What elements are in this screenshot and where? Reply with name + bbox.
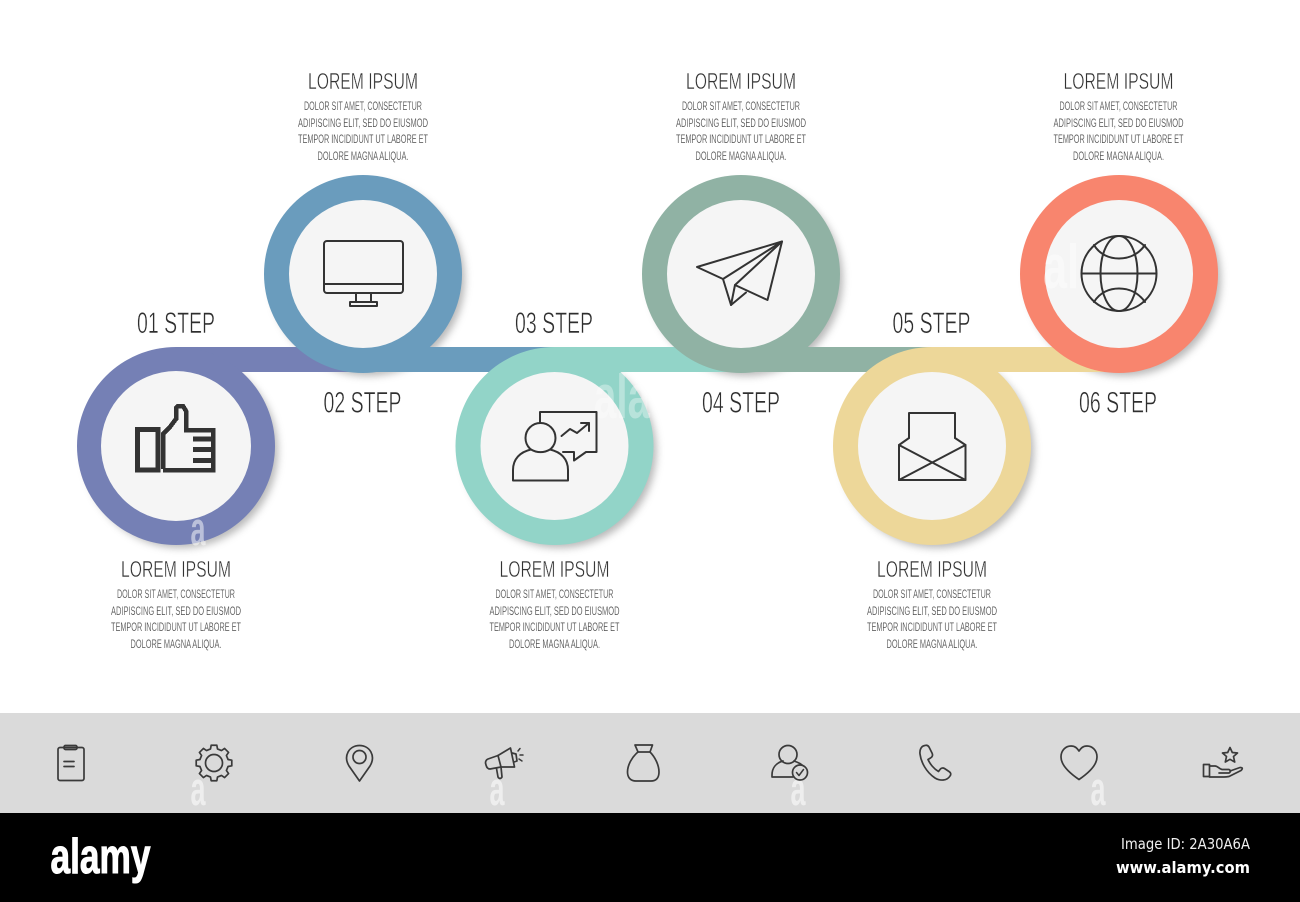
text block: step 5: TEMPOR INCIDIDUNT UT LABORE ET [867,622,997,634]
text block: step 3: TEMPOR INCIDIDUNT UT LABORE ET [490,622,620,634]
step 5 ring and connector [833,347,1122,545]
watermark letters on icon strip: a [190,762,206,815]
step labels: 02 STEP [324,386,402,420]
icon: money bag [628,745,659,781]
footer: black watermark bar [0,813,1300,902]
step labels [137,307,1157,420]
text block: step 3: DOLOR SIT AMET, CONSECTETUR [496,589,614,601]
alamy logo: alamy [50,830,150,884]
text block: step 6: TEMPOR INCIDIDUNT UT LABORE ET [1054,134,1184,146]
text block: step 6: LOREM IPSUM [1064,68,1174,94]
watermark letters on circles: al [1043,233,1079,302]
text block: step 2: ADIPISCING ELIT, SED DO EIUSMOD [298,118,428,130]
text block: step 5 [867,556,997,651]
text block: step 1: DOLORE MAGNA ALIQUA. [130,639,222,651]
step labels: 05 STEP [892,307,970,340]
step 3 ring and connector [456,347,744,545]
text block: step 2: LOREM IPSUM [308,68,418,94]
text block: step 3: ADIPISCING ELIT, SED DO EIUSMOD [490,606,620,618]
icon: user with check badge [772,746,808,780]
text block: step 1: DOLOR SIT AMET, CONSECTETUR [117,589,235,601]
icon: desktop monitor [324,241,403,306]
text block: step 2: DOLORE MAGNA ALIQUA. [318,151,408,163]
website url: www.alamy.com [1116,858,1250,877]
step labels: 01 STEP [137,307,215,340]
watermark letters on icon strip: a [790,762,806,815]
icon: globe [1082,236,1156,311]
text block: step 6: DOLOR SIT AMET, CONSECTETUR [1060,101,1178,113]
text block: step 3: LOREM IPSUM [500,556,610,582]
step 4 ring and connector [642,175,936,373]
watermark letters on circles [190,233,1079,555]
icon: paper airplane [697,242,782,305]
icon: open envelope [899,413,966,480]
icon: clipboard [58,746,84,780]
step labels: 03 STEP [515,307,593,340]
step 2 ring and connector [264,175,558,373]
icon: heart [1061,746,1097,780]
circle shadows [84,182,1221,548]
watermark letters on circles: ala [594,363,650,432]
watermark letters on circles: a [190,502,206,555]
text block: step 4 [676,68,806,163]
icon: thumbs up [138,406,213,470]
icon: gear [196,745,232,781]
icon: megaphone [486,748,523,778]
step labels: 06 STEP [1079,386,1157,420]
watermark letters on icon strip: a [1090,762,1106,815]
icon: person with chart speech bubble [513,412,596,480]
icon: telephone [920,745,951,780]
text block: step 5: DOLORE MAGNA ALIQUA. [886,639,978,651]
text block: step 5: ADIPISCING ELIT, SED DO EIUSMOD [867,606,997,618]
icon: map pin [347,746,372,781]
text block: step 3: DOLORE MAGNA ALIQUA. [509,639,600,651]
watermark letters on icon strip [190,762,1106,815]
text block: step 4: DOLORE MAGNA ALIQUA. [696,151,786,163]
watermark letters on icon strip: a [490,762,505,815]
text block: step 5: DOLOR SIT AMET, CONSECTETUR [873,589,991,601]
text block: step 1: ADIPISCING ELIT, SED DO EIUSMOD [111,606,241,618]
icon: hand holding star [1204,748,1242,777]
step labels: 04 STEP [702,386,780,420]
text block: step 4: ADIPISCING ELIT, SED DO EIUSMOD [676,118,806,130]
text block: step 2: DOLOR SIT AMET, CONSECTETUR [304,101,422,113]
step 1 ring and connector [77,347,366,545]
text block: step 4: TEMPOR INCIDIDUNT UT LABORE ET [676,134,806,146]
step 6 ring [1020,175,1218,373]
text block: step 2: TEMPOR INCIDIDUNT UT LABORE ET [298,134,428,146]
text block: step 4: DOLOR SIT AMET, CONSECTETUR [682,101,800,113]
text block: step 5: LOREM IPSUM [877,556,987,582]
text block: step 6: ADIPISCING ELIT, SED DO EIUSMOD [1054,118,1184,130]
text block: step 1: TEMPOR INCIDIDUNT UT LABORE ET [111,622,241,634]
text block: step 2 [298,68,428,163]
image id: Image ID: 2A30A6A [1121,835,1251,853]
text block: step 6: DOLORE MAGNA ALIQUA. [1073,151,1164,163]
text block: step 3 [490,556,620,651]
text block: step 4: LOREM IPSUM [686,68,796,94]
text block: step 1: LOREM IPSUM [121,556,231,582]
text block: step 1 [111,556,241,651]
panel: grey icon strip [0,713,1300,813]
text block: step 6 [1054,68,1184,163]
